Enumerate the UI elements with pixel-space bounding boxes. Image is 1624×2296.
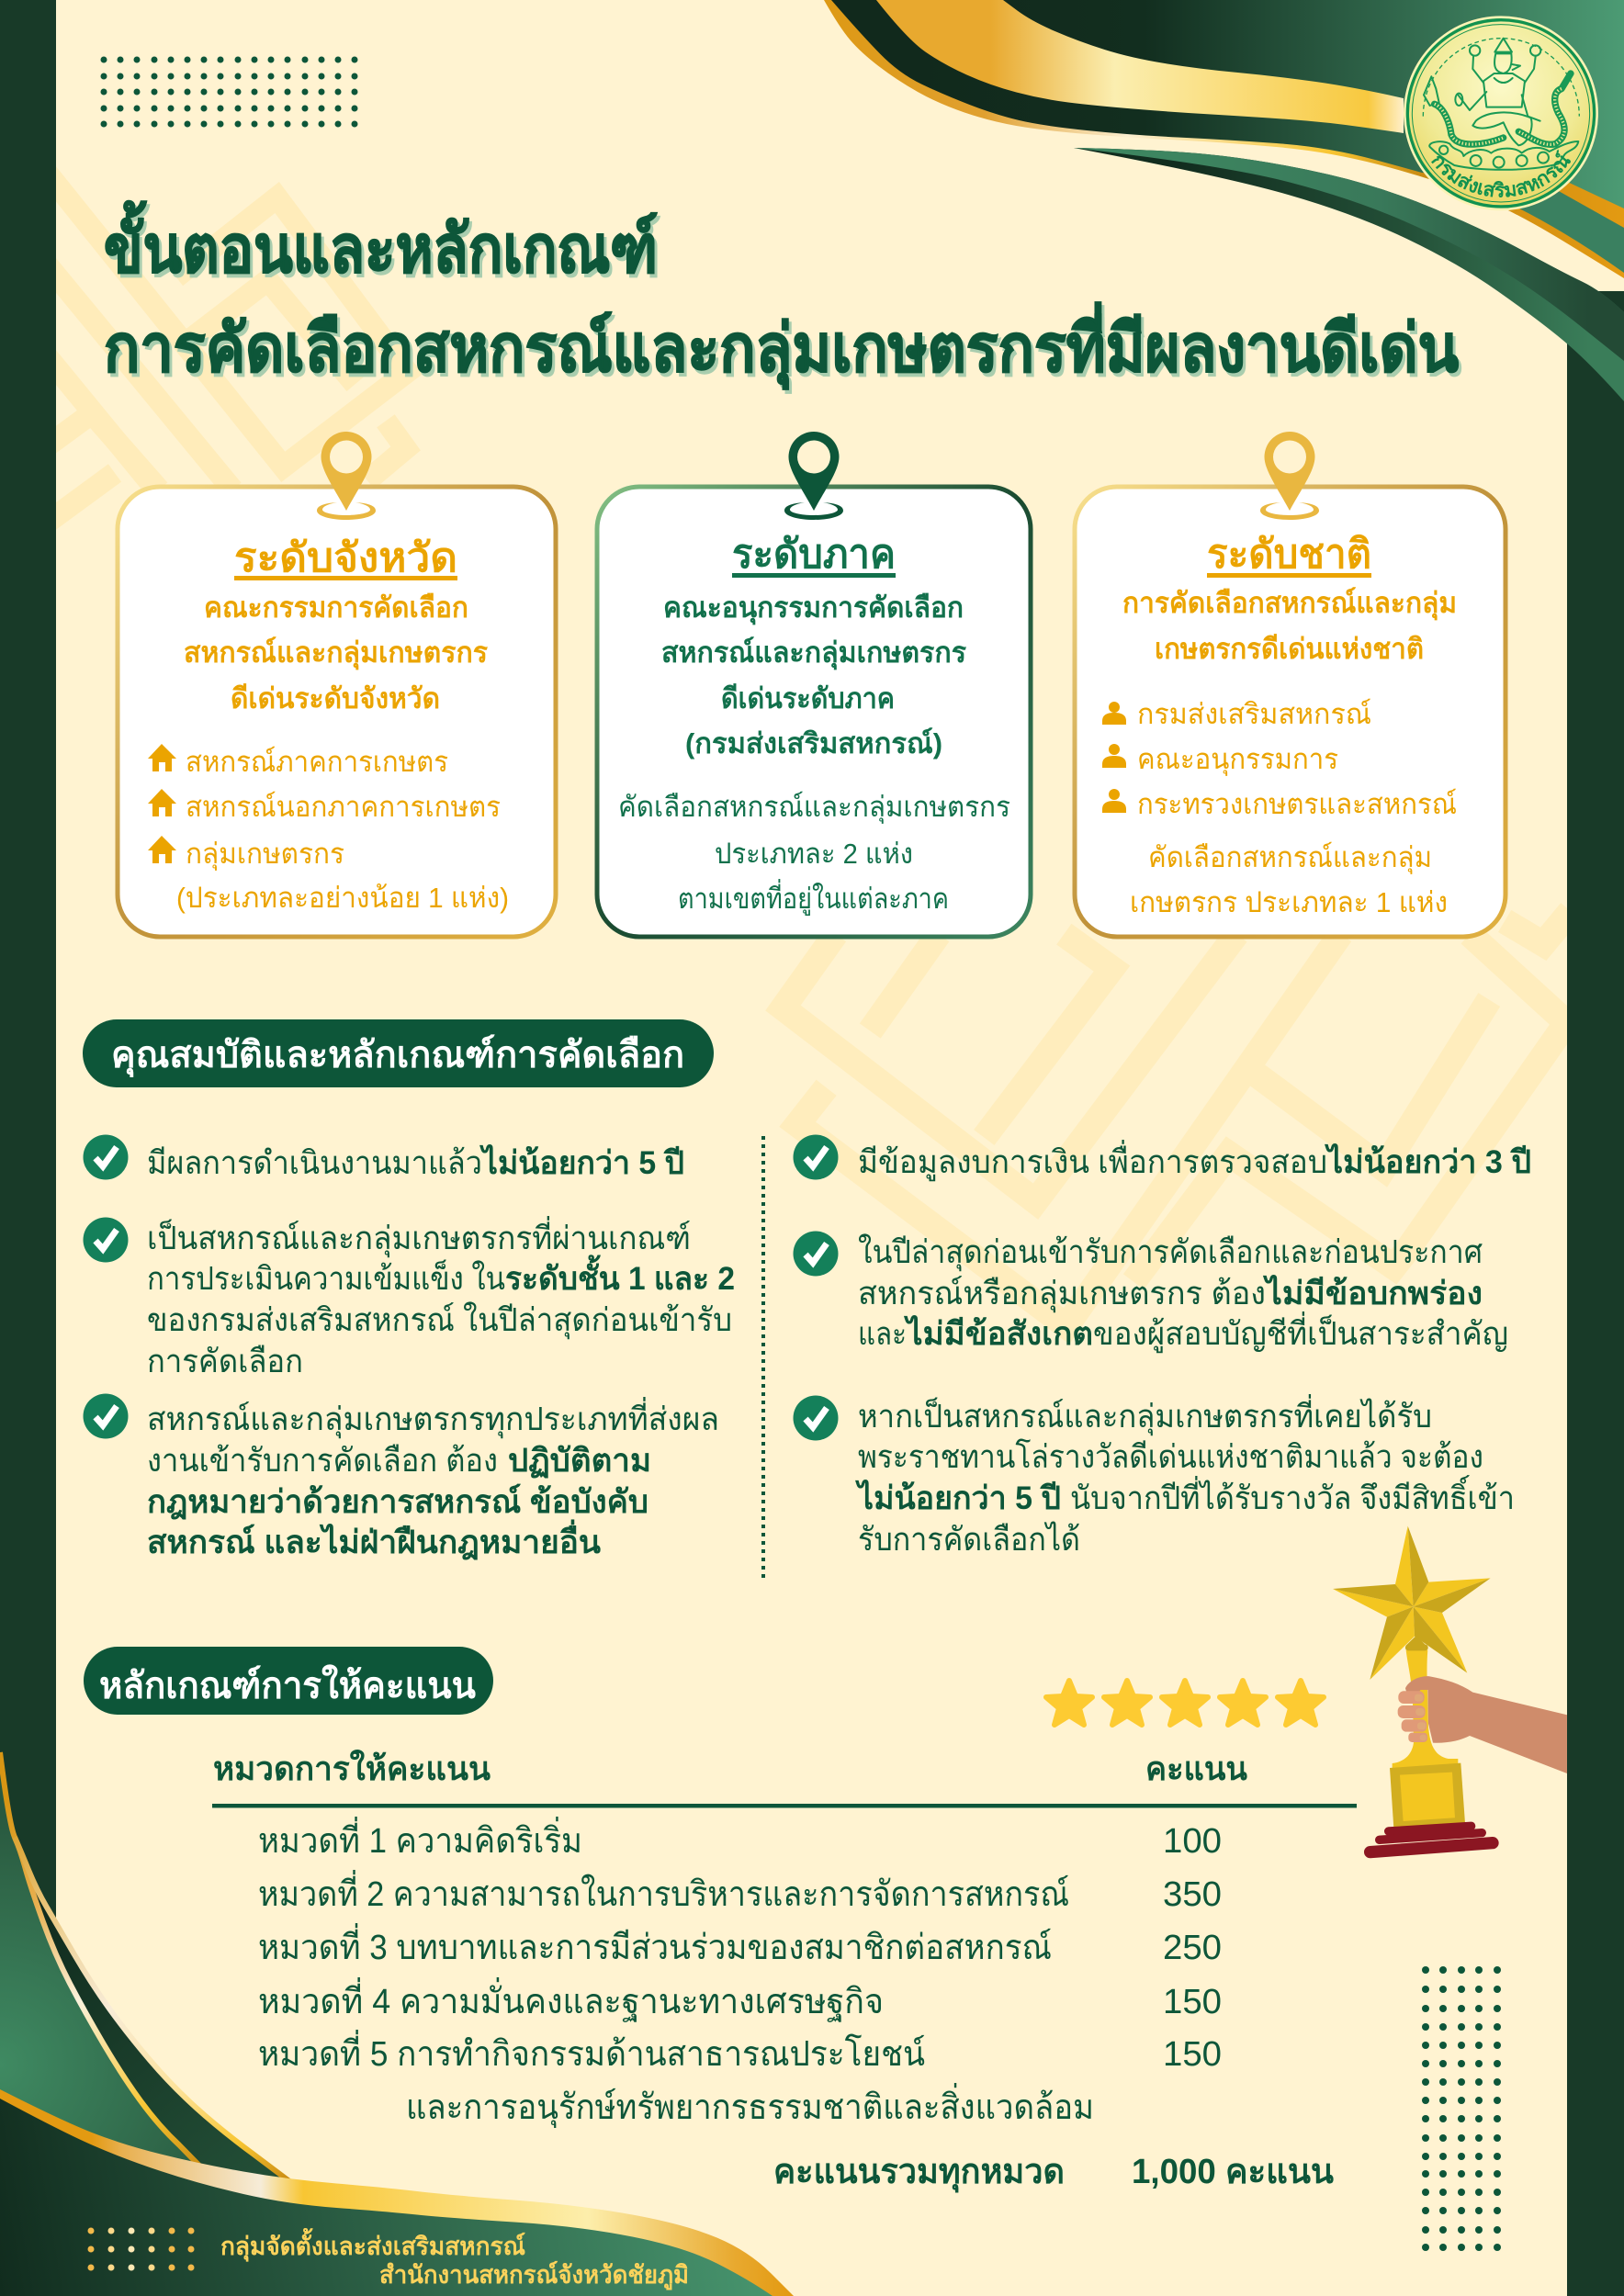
list: cooperative types: สหกรณ์ภาคการเกษตร [186, 746, 448, 778]
text block: committee: ดีเด่นระดับภาค [721, 682, 895, 715]
list: cooperative types: (ประเภทละอย่างน้อย 1 แห่ง) [176, 882, 509, 914]
table rows: 150 [1163, 1983, 1222, 2021]
text block: selection: คัดเลือกสหกรณ์และกลุ่มเกษตรกร [618, 791, 1010, 825]
criterion 2: การคัดเลือก [147, 1344, 303, 1379]
icon: location pin [317, 432, 376, 520]
table rows: หมวดที่ 2 ความสามารถในการบริหารและการจัดการสหกรณ์ [258, 1870, 1069, 1914]
heading: ระดับจังหวัด [234, 535, 457, 580]
criterion 5 [794, 1231, 1508, 1353]
icon: location pin [784, 432, 843, 520]
list: agencies: เกษตรกร ประเภทละ 1 แห่ง [1130, 886, 1448, 918]
list: agencies: กระทรวงเกษตรและสหกรณ์ [1137, 788, 1457, 820]
right vertical bar [1567, 291, 1624, 2296]
criterion 3: กฎหมายว่าด้วยการสหกรณ์ ข้อบังคับ [147, 1483, 648, 1520]
criterion 5: ไม่มีข้อสังเกต [903, 1314, 1093, 1352]
dot grid: footer [88, 2228, 195, 2270]
footer text [220, 2227, 689, 2290]
criterion 6: หากเป็นสหกรณ์และกลุ่มเกษตรกรที่เคยได้รับ [858, 1394, 1432, 1435]
text block: selection: การคัดเลือกสหกรณ์และกลุ่ม [1122, 587, 1457, 621]
list: agencies [1102, 698, 1457, 918]
criterion 6: รับการคัดเลือกได้ [858, 1521, 1080, 1558]
table header: หมวดการให้คะแนน [213, 1749, 491, 1787]
criterion 6: พระราชทานโล่รางวัลดีเด่นแห่งชาติมาแล้ว จะต้อง [858, 1438, 1483, 1475]
table rows: 150 [1163, 2035, 1222, 2074]
criterion 2 [83, 1216, 735, 1379]
text block: committee: ดีเด่นระดับจังหวัด [231, 682, 440, 715]
panel: regional level [597, 432, 1031, 937]
dot grid: top left [101, 57, 358, 127]
criterion 5: ในปีล่าสุดก่อนเข้ารับการคัดเลือกและก่อนประกาศ [858, 1233, 1483, 1271]
title: การคัดเลือกสหกรณ์และกลุ่มเกษตรกรที่มีผลงานดีเด่น [107, 305, 1461, 394]
table total: คะแนนรวมทุกหมวด [773, 2153, 1065, 2193]
table rows: หมวดที่ 1 ความคิดริเริ่ม [258, 1817, 582, 1861]
text block: committee: สหกรณ์และกลุ่มเกษตรกร [184, 636, 488, 670]
table header [213, 1749, 1247, 1787]
table rows: หมวดที่ 5 การทำกิจกรรมด้านสาธารณประโยชน์ [258, 2030, 925, 2074]
list: agencies: คณะอนุกรรมการ [1137, 743, 1338, 777]
footer text: กลุ่มจัดตั้งและส่งเสริมสหกรณ์ [220, 2227, 525, 2262]
title: ขั้นตอนและหลักเกณฑ์ [107, 204, 660, 290]
criterion 2: ของกรมส่งเสริมสหกรณ์ ในปีล่าสุดก่อนเข้ารับ [147, 1301, 732, 1339]
criterion 3: งานเข้ารับการคัดเลือก ต้อง [147, 1443, 498, 1479]
emblem: Cooperative Promotion Department seal [1404, 16, 1598, 211]
text block: selection [1122, 587, 1457, 665]
heading: ระดับชาติ [1207, 532, 1371, 577]
text block: committee: สหกรณ์และกลุ่มเกษตรกร [661, 636, 966, 670]
section heading: scoring [84, 1647, 493, 1715]
criterion 2: ระดับชั้น 1 และ 2 [505, 1255, 735, 1297]
text block: committee: (กรมส่งเสริมสหกรณ์) [685, 727, 942, 760]
table total: 1,000 คะแนน [1132, 2153, 1334, 2191]
table rows: หมวดที่ 3 บทบาทและการมีส่วนร่วมของสมาชิกต่อสหกรณ์ [258, 1923, 1052, 1967]
criteria column left [83, 1135, 735, 1560]
criterion 5: และ [858, 1316, 907, 1352]
criterion 6: นับจากปีที่ได้รับรางวัล จึงมีสิทธิ์เข้า [1070, 1475, 1515, 1516]
table rows: หมวดที่ 4 ความมั่นคงและฐานะทางเศรษฐกิจ [258, 1977, 884, 2022]
title: การคัดเลือกสหกรณ์และกลุ่มเกษตรกรที่มีผลงานดีเด่น [104, 301, 1459, 390]
title [104, 200, 1461, 394]
lower right leaf swoosh [1074, 148, 1624, 401]
background pattern: middle right [783, 911, 1571, 1326]
left vertical bar [0, 0, 56, 1956]
section heading: qualifications [83, 1019, 714, 1087]
table rows: 350 [1163, 1875, 1222, 1914]
emblem: Cooperative Promotion Department seal: กรมส่งเสริมสหกรณ์ [1431, 149, 1571, 197]
criterion 2: เป็นสหกรณ์และกลุ่มเกษตรกรที่ผ่านเกณฑ์ [147, 1216, 691, 1257]
bottom-left ribbon swoosh [0, 1752, 794, 2296]
criterion 3: สหกรณ์ และไม่ฝ่าฝืนกฎหมายอื่น [147, 1519, 601, 1560]
text block: committee: คณะกรรมการคัดเลือก [204, 591, 468, 624]
text block: selection: เกษตรกรดีเด่นแห่งชาติ [1155, 633, 1424, 665]
criterion 6: ไม่น้อยกว่า 5 ปี [854, 1479, 1061, 1516]
criterion 5: ไม่มีข้อบกพร่อง [1262, 1274, 1483, 1311]
criterion 4: มีข้อมูลงบการเงิน เพื่อการตรวจสอบ [858, 1140, 1327, 1181]
title: ขั้นตอนและหลักเกณฑ์ [104, 200, 658, 287]
panel: national level [1075, 432, 1506, 937]
criterion 5: ของผู้สอบบัญชีที่เป็นสาระสำคัญ [1093, 1311, 1508, 1353]
score table [212, 1749, 1357, 2193]
icon: five stars [1046, 1681, 1324, 1725]
list: cooperative types: สหกรณ์นอกภาคการเกษตร [186, 791, 501, 823]
footer text: สำนักงานสหกรณ์จังหวัดชัยภูมิ [379, 2260, 689, 2290]
table rows [258, 1817, 1222, 2128]
criterion 2: การประเมินความเข้มแข็ง ใน [147, 1259, 505, 1297]
dot grid: bottom right [1422, 1966, 1501, 2251]
text block: committee: คณะอนุกรรมการคัดเลือก [663, 591, 964, 625]
top-right ribbon swoosh [824, 0, 1624, 278]
heading: ระดับภาค [732, 532, 896, 577]
section heading: scoring: หลักเกณฑ์การให้คะแนน [99, 1664, 476, 1706]
criterion 3: ปฏิบัติตาม [508, 1443, 651, 1479]
list: cooperative types: กลุ่มเกษตรกร [186, 838, 344, 872]
criterion 6 [794, 1394, 1515, 1558]
background pattern: top left [46, 172, 407, 523]
text block: committee [184, 591, 488, 715]
criterion 1 [83, 1135, 684, 1181]
criterion 4: ไม่น้อยกว่า 3 ปี [1324, 1142, 1531, 1180]
section heading: qualifications: คุณสมบัติและหลักเกณฑ์การคัดเลือก [111, 1034, 684, 1078]
list: cooperative types [148, 744, 509, 914]
criterion 5: สหกรณ์หรือกลุ่มเกษตรกร ต้อง [858, 1276, 1266, 1312]
list: agencies: กรมส่งเสริมสหกรณ์ [1137, 698, 1371, 730]
panel: provincial level [118, 432, 556, 937]
icon: hand holding trophy [1333, 1526, 1567, 1852]
table rows: 250 [1163, 1929, 1222, 1967]
text block: committee [661, 591, 966, 760]
icon: location pin [1260, 432, 1319, 520]
criterion 1: ไม่น้อยกว่า 5 ปี [479, 1143, 684, 1181]
table rows: 100 [1163, 1822, 1222, 1861]
text block: selection: ประเภทละ 2 แห่ง [715, 838, 913, 870]
criteria column right [794, 1135, 1531, 1558]
text block: selection: ตามเขตที่อยู่ในแต่ละภาค [678, 879, 949, 916]
criterion 4 [794, 1135, 1531, 1181]
table rows: และการอนุรักษ์ทรัพยากรธรรมชาติและสิ่งแวดล้อม [406, 2083, 1094, 2128]
table header: คะแนน [1145, 1750, 1247, 1787]
table total [773, 2153, 1334, 2193]
text block: selection [618, 791, 1010, 916]
criterion 1: มีผลการดำเนินงานมาแล้ว [147, 1145, 482, 1181]
criterion 3: สหกรณ์และกลุ่มเกษตรกรทุกประเภทที่ส่งผล [147, 1397, 719, 1438]
criterion 3 [83, 1394, 719, 1560]
list: agencies: คัดเลือกสหกรณ์และกลุ่ม [1148, 841, 1432, 875]
